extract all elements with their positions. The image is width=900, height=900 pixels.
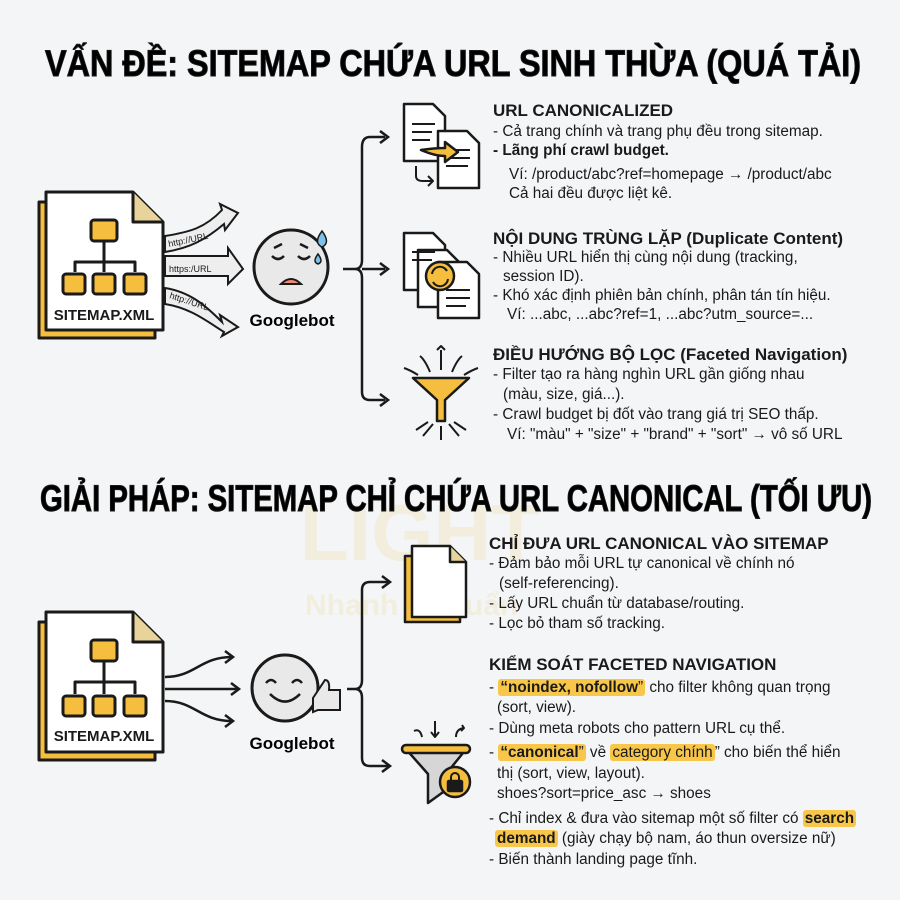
text: control faceted navigation [489,655,856,868]
watermark: Nhanh - Chuẩn [305,589,518,622]
text: faceted navigation [493,344,847,443]
text: control faceted navigation: (sort, view). [497,699,576,716]
icon: sitemap file bottom [39,612,163,760]
arrows: clean urls bottom [165,651,239,727]
text: duplicate content [493,228,843,323]
text: faceted navigation: ĐIỀU HƯỚNG BỘ LỌC (Faceted Navigation) [493,345,847,364]
text: control faceted navigation: - “canonical” về category chính” cho biến thể hiển [489,744,841,761]
icon: happy googlebot: Googlebot [250,734,335,753]
icon: canonical doc [405,546,466,622]
text: control faceted navigation: thị (sort, view, layout). [497,764,645,782]
text: control faceted navigation: - Biến thành landing page tĩnh. [489,850,697,868]
text: canonical only: - Đảm bảo mỗi URL tự canonical về chính nó [489,555,795,572]
text: duplicate content: Ví: ...abc, ...abc?ref=1, ...abc?utm_source=... [507,306,813,323]
text: url canonicalized: URL CANONICALIZED [493,101,673,120]
text: duplicate content: - Khó xác định phiên bản chính, phân tán tín hiệu. [493,287,831,304]
text: duplicate content: - Nhiều URL hiển thị cùng nội dung (tracking, [493,249,798,266]
watermark: LIGHT [300,488,540,577]
text: url canonicalized: Cả hai đều được liệt kê. [509,185,672,202]
text: control faceted navigation: shoes?sort=price_asc → shoes [497,785,711,802]
icon: sad googlebot: Googlebot [250,311,335,330]
arrows: urls top: http://URL [167,231,209,249]
text: faceted navigation: (màu, size, giá...). [503,386,625,403]
icon: sitemap file top [39,192,163,338]
text: duplicate content: NỘI DUNG TRÙNG LẶP (Duplicate Content) [493,229,843,248]
text: canonical only: (self-referencing). [499,575,619,592]
icon: duplicate content docs [404,233,479,318]
icon: happy googlebot [250,655,340,753]
text: url canonicalized: - Cả trang chính và trang phụ đều trong sitemap. [493,123,823,140]
text: canonical only [489,534,829,632]
icon: sitemap file bottom: SITEMAP.XML [54,728,154,745]
icon: funnel with arrows [404,346,478,440]
text: canonical only: - Lấy URL chuẩn từ database/routing. [489,595,744,612]
text: control faceted navigation: KIỂM SOÁT FACETED NAVIGATION [489,655,776,674]
text: faceted navigation: Ví: "màu" + "size" + "brand" + "sort" → vô số URL [507,426,842,443]
arrows: urls top [165,204,243,336]
text: canonical only: - Lọc bỏ tham số tracking. [489,615,665,632]
text: faceted navigation: - Filter tạo ra hàng nghìn URL gần giống nhau [493,366,805,383]
text: control faceted navigation: demand (giày chạy bộ nam, áo thun oversize nữ) [497,830,836,847]
icon: duplicate docs [404,104,479,188]
icon: sitemap file top: SITEMAP.XML [54,307,154,324]
arrows: urls top: https:/URL [169,264,212,274]
arrows: urls top: http://URL [168,290,210,312]
text: canonical only: CHỈ ĐƯA URL CANONICAL VÀO SITEMAP [489,534,829,553]
text: url canonicalized: - Lãng phí crawl budget. [493,142,669,159]
text: url canonicalized [493,101,832,202]
arrow: bracket bottom [347,576,390,772]
arrow: bracket top [343,131,388,406]
icon: locked funnel [402,721,470,803]
text: control faceted navigation: - Dùng meta robots cho pattern URL cụ thể. [489,720,785,736]
text: url canonicalized: Ví: /product/abc?ref=homepage → /product/abc [509,166,832,183]
text: control faceted navigation: - “noindex, nofollow” cho filter không quan trọng [489,678,831,696]
text: faceted navigation: - Crawl budget bị đốt vào trang giá trị SEO thấp. [493,406,819,423]
watermark [300,488,540,622]
text: duplicate content: session ID). [503,268,584,285]
text: control faceted navigation: - Chỉ index & đưa vào sitemap một số filter có search [489,810,854,826]
icon: sad googlebot [250,230,335,330]
